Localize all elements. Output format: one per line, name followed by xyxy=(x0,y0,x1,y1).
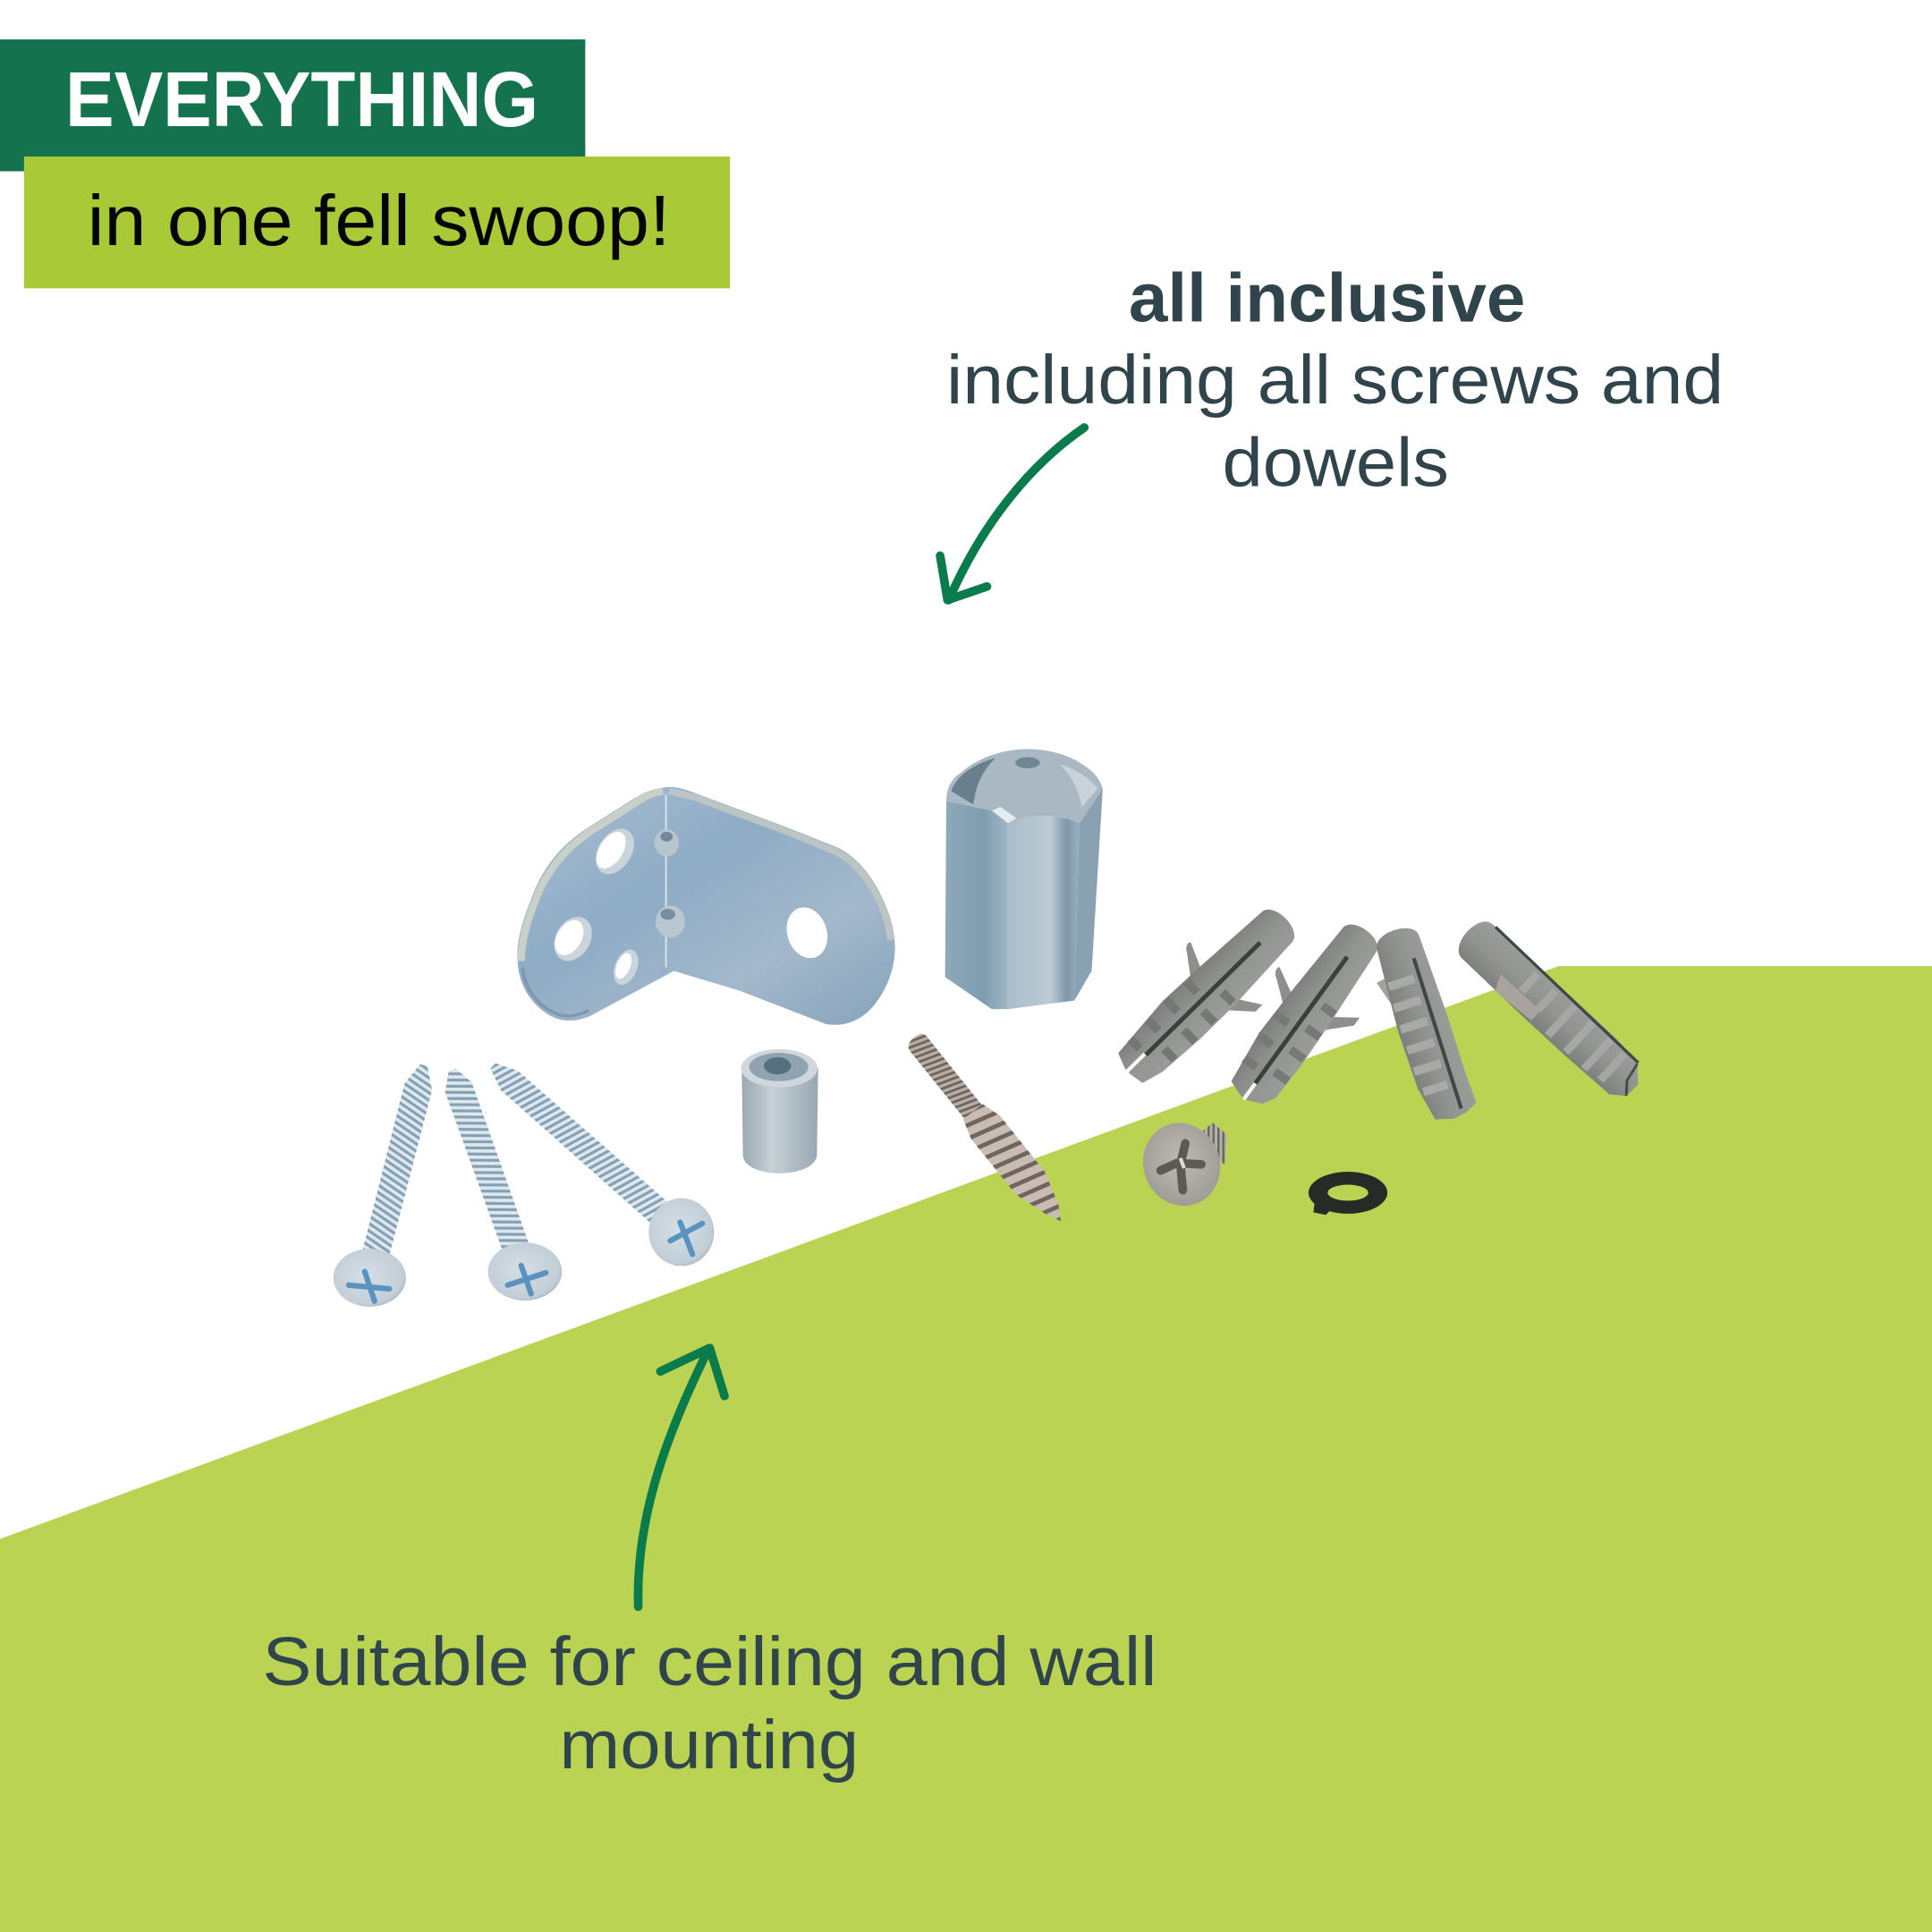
heading: EVERYTHING banner: EVERYTHING xyxy=(65,56,538,143)
icon: hanger bolt xyxy=(899,1027,1075,1233)
text block: suitable for ceiling and wall mounting xyxy=(262,1623,1157,1784)
icon: cylindrical spacer xyxy=(741,1049,818,1174)
icon: spring washer xyxy=(1309,1172,1387,1215)
text block: all inclusive: including all screws and xyxy=(946,342,1724,419)
text block: all inclusive: dowels xyxy=(1223,424,1449,501)
heading: in one fell swoop banner: in one fell swoop! xyxy=(88,181,670,260)
icon: pan head screw 3 xyxy=(484,1055,714,1266)
icon: plastic wall dowel 3 xyxy=(1363,922,1479,1129)
heading: in one fell swoop banner xyxy=(24,157,730,288)
icon: plastic wall dowel 1 xyxy=(1092,882,1318,1106)
text block: all inclusive xyxy=(946,260,1724,501)
heading: EVERYTHING banner xyxy=(0,39,585,171)
background: lime diagonal panel xyxy=(0,966,1932,1932)
text block: suitable for ceiling and wall mounting: Suitable for ceiling and wall xyxy=(262,1623,1157,1700)
icon: hex coupling nut xyxy=(945,750,1103,1009)
icon: pan head screw 2 xyxy=(439,1065,562,1301)
icon: angle bracket xyxy=(517,787,895,1025)
bracket holes xyxy=(547,822,834,988)
icon: countersunk screw xyxy=(1131,1112,1232,1216)
icon: plastic wall dowel 4 xyxy=(1451,915,1651,1106)
text block: all inclusive: all inclusive xyxy=(1129,260,1525,337)
bracket rivet bumps xyxy=(654,829,685,937)
arrow: pointing down to hardware xyxy=(940,428,1084,600)
text block: suitable for ceiling and wall mounting: mounting xyxy=(559,1707,859,1784)
icon: pan head screw 1 xyxy=(334,1062,437,1307)
icon: plastic wall dowel 2 xyxy=(1203,901,1403,1126)
arrow: pointing up to mounting surface xyxy=(638,1348,724,1606)
